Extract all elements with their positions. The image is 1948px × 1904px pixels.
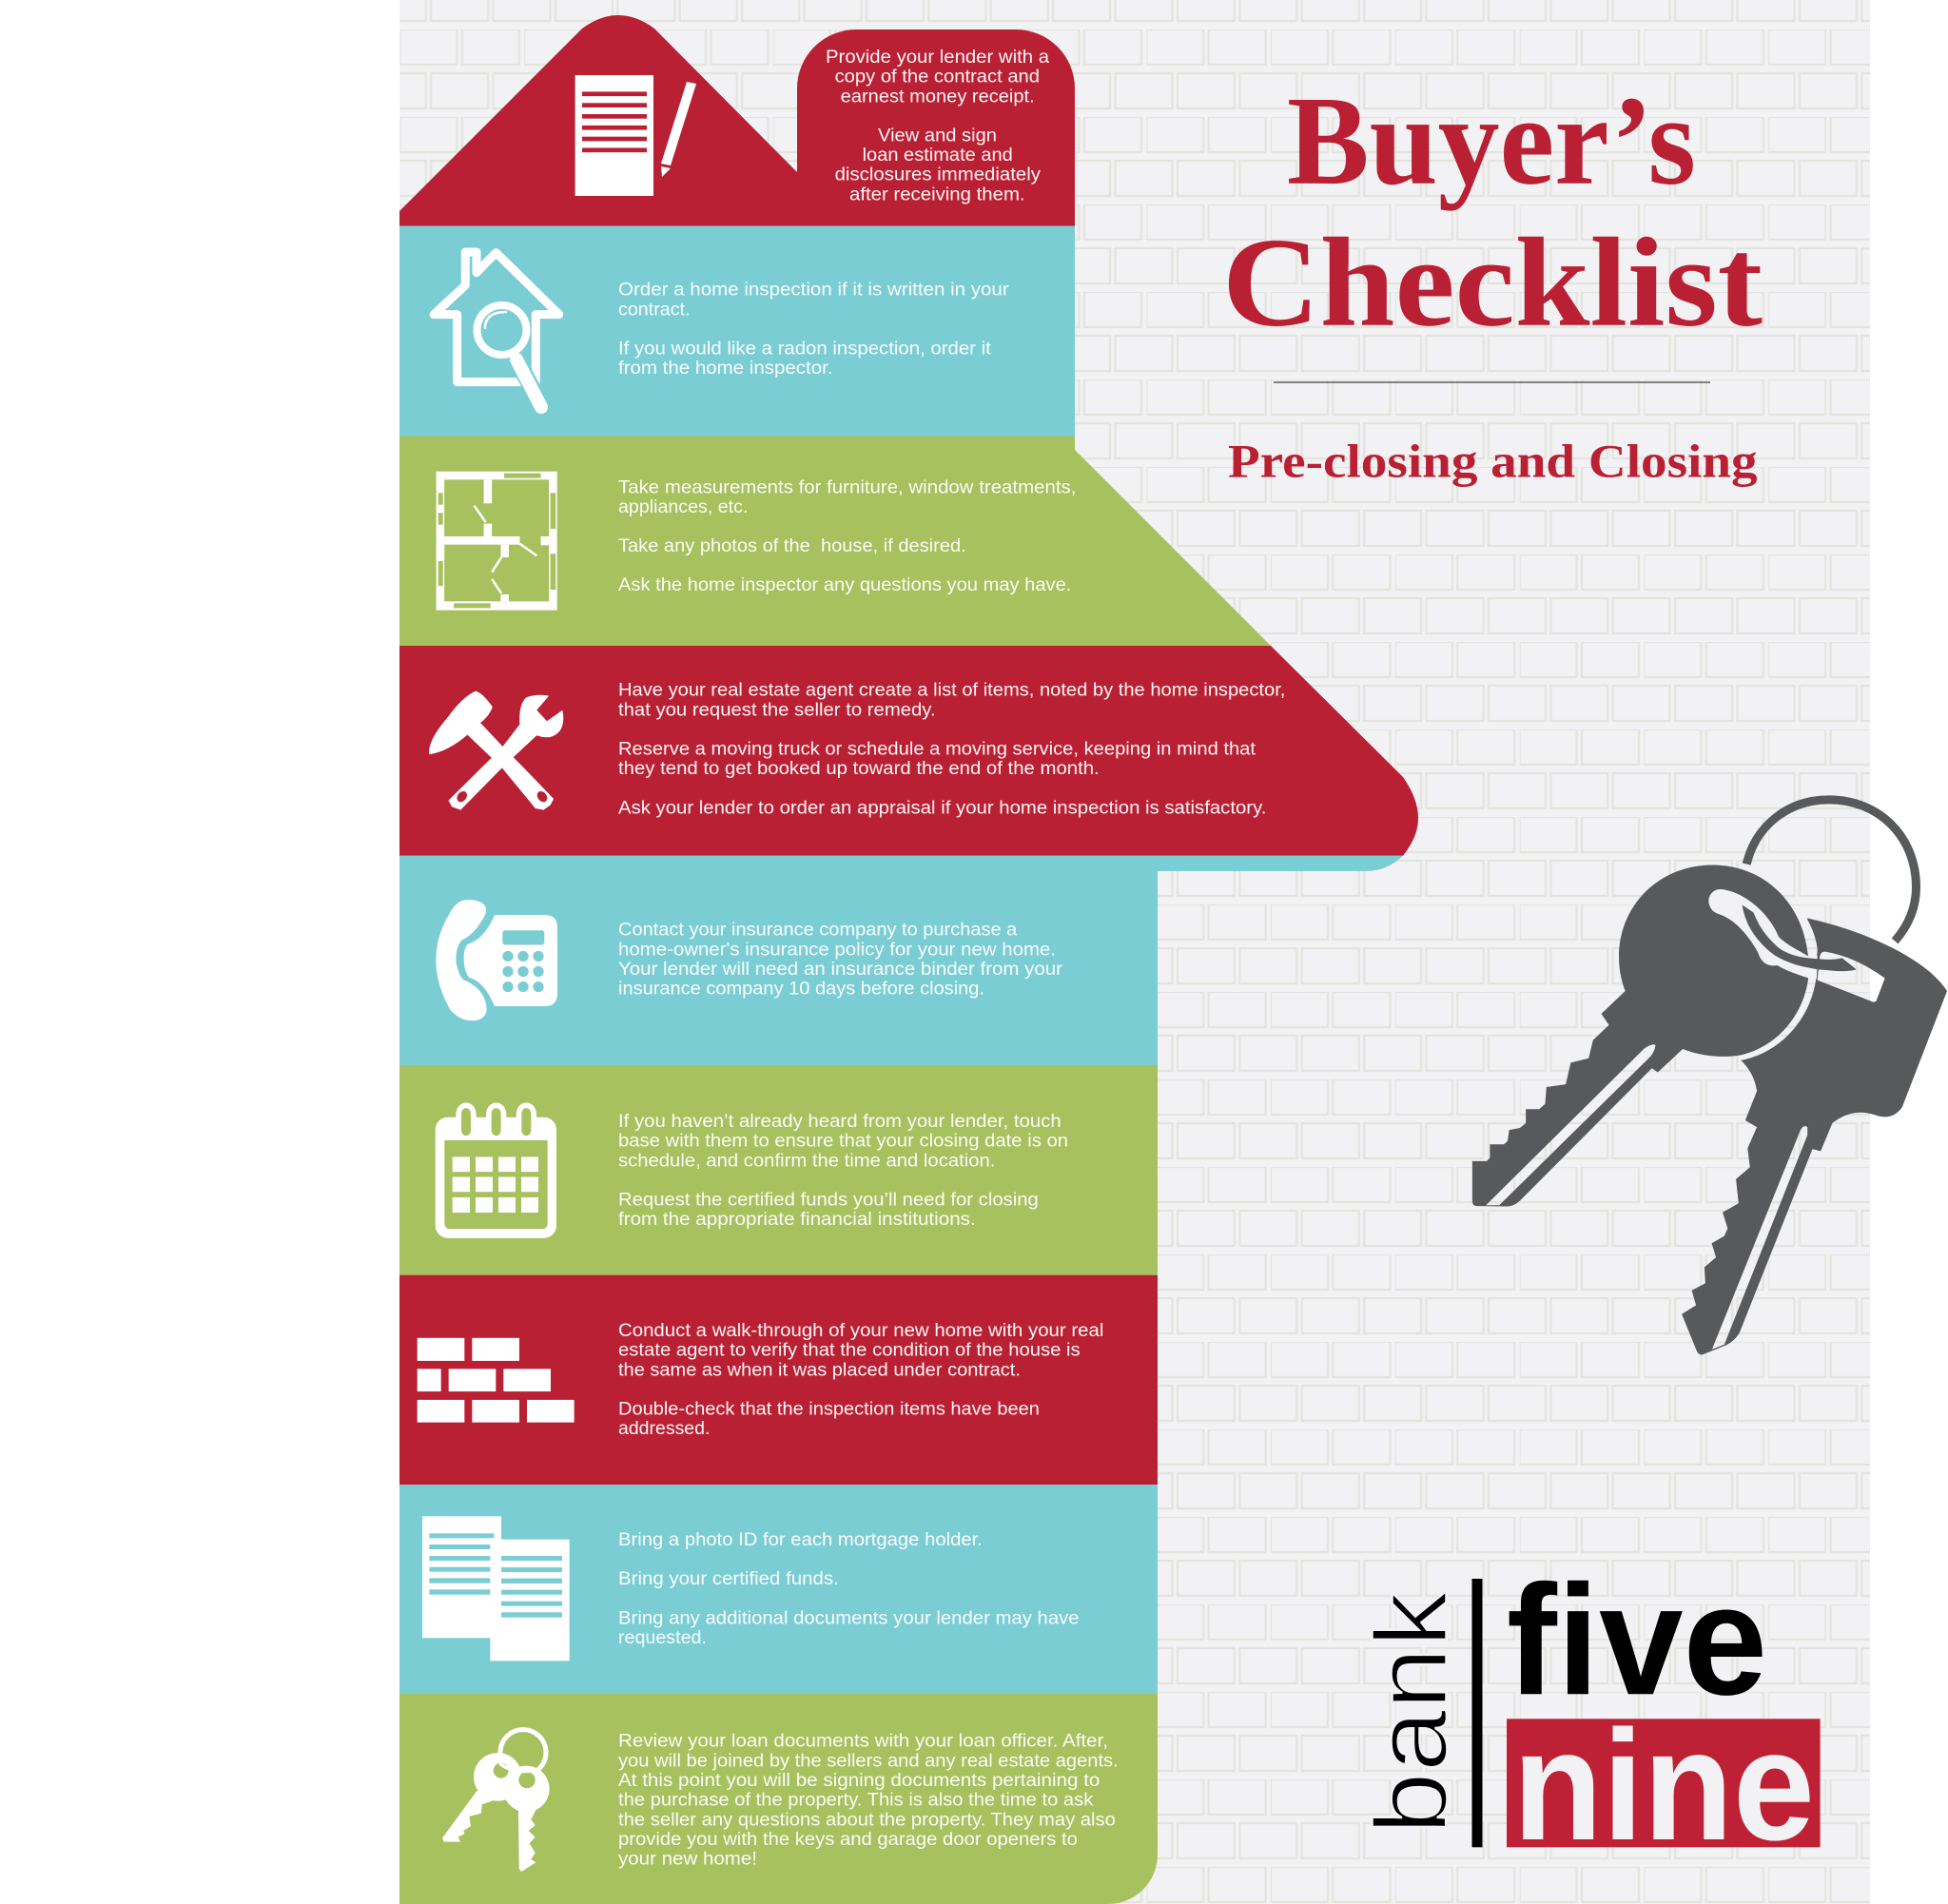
logo word: nine: nine	[1512, 1698, 1815, 1873]
text: step 3: Take measurements for furniture, window treatments,	[618, 477, 1076, 497]
text: step 7: Conduct a walk-through of your new home with your real	[618, 1321, 1103, 1341]
icon: large keys	[1472, 800, 1947, 1354]
text: step 8: requested.	[618, 1628, 707, 1648]
icon: telephone	[436, 900, 557, 1020]
text: step 5: Your lender will need an insurance binder from your	[618, 960, 1063, 980]
text: step 1: copy of the contract and	[835, 68, 1040, 87]
subtitle: Pre-closing and Closing	[1228, 435, 1758, 488]
text: step 7	[618, 1321, 1103, 1439]
icon: hammer and wrench	[429, 691, 563, 810]
text: step 3: Ask the home inspector any questions you may have.	[618, 575, 1071, 595]
text: step 1: disclosures immediately	[835, 165, 1042, 185]
text: step 2: Order a home inspection if it is written in your	[618, 281, 1009, 301]
panel: step 7 walk-through	[399, 1275, 1158, 1485]
text: step 5: Contact your insurance company to purchase a	[618, 921, 1018, 941]
text: step 4: that you request the seller to remedy.	[618, 700, 936, 720]
text: step 4: they tend to get booked up toward the end of the month.	[618, 759, 1100, 779]
text: step 8: Bring a photo ID for each mortgage holder.	[618, 1530, 983, 1550]
text: step 3	[618, 477, 1076, 595]
panel: step 5 insurance	[399, 856, 1403, 1065]
text: step 5	[618, 921, 1063, 1000]
panel: step 2 home inspection	[399, 226, 1075, 436]
text: step 6	[618, 1112, 1068, 1230]
panel: step 8 bring documents	[399, 1485, 1158, 1694]
text: step 2	[618, 281, 1009, 379]
text: step 4: Have your real estate agent create a list of items, noted by the home inspector,	[618, 681, 1285, 701]
text: step 1: earnest money receipt.	[841, 87, 1035, 107]
icon: floor plan	[437, 472, 557, 611]
text: step 9: you will be joined by the sellers and any real estate agents.	[618, 1751, 1119, 1771]
text: step 6: from the appropriate financial institutions.	[618, 1210, 976, 1230]
title	[1222, 70, 1763, 353]
logo word: five: five	[1507, 1552, 1767, 1727]
text: step 5: home-owner's insurance policy for your new home.	[618, 940, 1056, 960]
text: step 6: Request the certified funds you’ll need for closing	[618, 1190, 1039, 1210]
text: step 5: insurance company 10 days before closing.	[618, 980, 984, 1000]
text: step 1: View and sign	[878, 126, 997, 146]
text: step 2: from the home inspector.	[618, 359, 833, 379]
text: step 9	[618, 1732, 1119, 1870]
text: step 4: Ask your lender to order an appraisal if your home inspection is satisfactory.	[618, 798, 1266, 818]
title: Checklist	[1222, 212, 1763, 353]
icon: house with magnifier	[434, 252, 559, 407]
text: step 6: base with them to ensure that your closing date is on	[618, 1132, 1068, 1152]
logo: bank five nine	[1354, 1552, 1821, 1873]
text: step 6: If you haven’t already heard from your lender, touch	[618, 1112, 1062, 1132]
text: step 9: the seller any questions about the property. They may also	[618, 1810, 1116, 1830]
text: step 4: Reserve a moving truck or schedule a moving service, keeping in mind that	[618, 739, 1256, 759]
text: step 7: the same as when it was placed under contract.	[618, 1360, 1021, 1380]
icon: documents	[422, 1516, 570, 1661]
text: step 8: Bring your certified funds.	[618, 1569, 839, 1589]
text: step 7: Double-check that the inspection items have been	[618, 1399, 1040, 1419]
text: step 1: loan estimate and	[863, 146, 1013, 165]
text: step 8	[618, 1530, 1080, 1648]
text: step 8: Bring any additional documents your lender may have	[618, 1608, 1080, 1628]
title: Buyer’s	[1287, 70, 1696, 211]
panel: step 3 measurements	[399, 436, 1271, 646]
logo word: bank: bank	[1354, 1590, 1469, 1835]
text: step 2: If you would like a radon inspection, order it	[618, 339, 992, 359]
text: step 9: provide you with the keys and garage door openers to	[618, 1830, 1078, 1850]
icon: document and pencil	[575, 75, 696, 196]
text: step 2: contract.	[618, 300, 691, 320]
icon: small keys	[442, 1730, 550, 1872]
text: step 6: schedule, and confirm the time and location.	[618, 1151, 995, 1171]
text: step 7: addressed.	[618, 1419, 710, 1439]
text: step 4	[618, 681, 1285, 818]
icon: calendar	[436, 1102, 556, 1238]
text: step 9: At this point you will be signing documents pertaining to	[618, 1771, 1100, 1791]
panel: step 4 repairs and moving	[399, 646, 1418, 856]
text: step 1: Provide your lender with a	[826, 48, 1049, 68]
text: step 9: your new home!	[618, 1850, 757, 1870]
text: step 9: Review your loan documents with your loan officer. After,	[618, 1732, 1108, 1752]
panel: step 1 roof	[399, 15, 1075, 226]
icon: bricks	[418, 1338, 575, 1423]
text: step 1: after receiving them.	[849, 185, 1025, 204]
text: step 3: Take any photos of the house, if desired.	[618, 536, 966, 556]
text: step 7: estate agent to verify that the condition of the house is	[618, 1341, 1081, 1361]
text: step 9: the purchase of the property. This is also the time to ask	[618, 1791, 1094, 1811]
text: step 1	[826, 48, 1049, 204]
panel: step 6 closing date	[399, 1065, 1158, 1275]
brick wall background	[399, 0, 1870, 1904]
text: step 3: appliances, etc.	[618, 497, 748, 517]
panel: step 9 closing	[399, 1694, 1158, 1904]
